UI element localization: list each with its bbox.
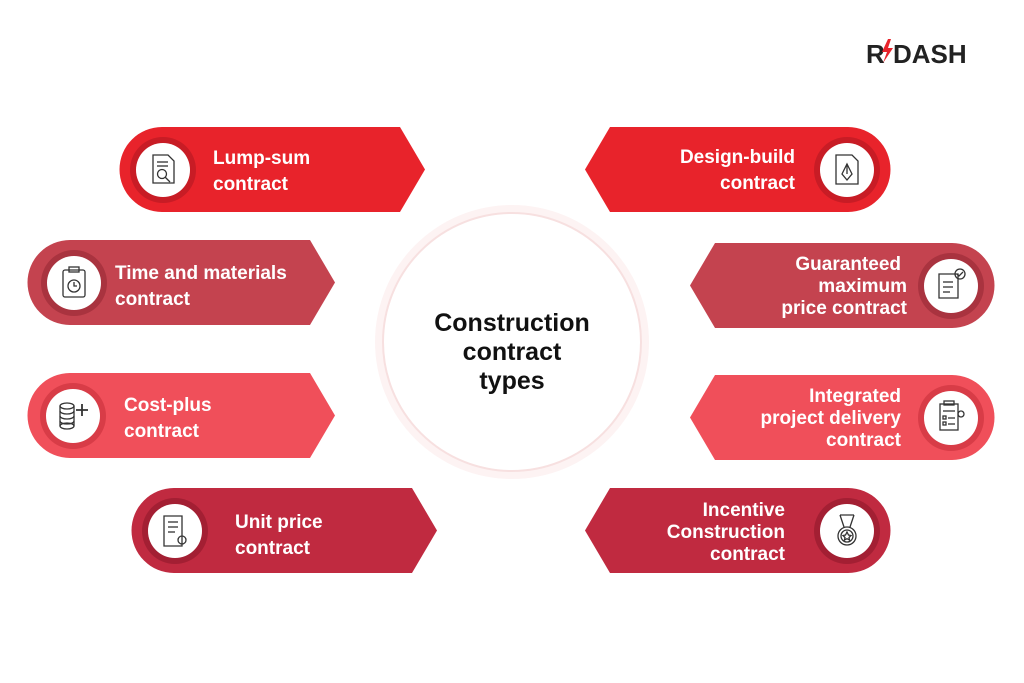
banner: Unit price [132, 488, 437, 573]
icon: scroll check [939, 269, 965, 298]
banner: Integrated project delivery: contract [826, 430, 902, 451]
banner: Time and materials: Time and materials [115, 263, 287, 284]
banner: Cost-plus [28, 373, 335, 458]
banner: Time and materials [28, 240, 335, 325]
icon: medal [838, 515, 856, 545]
banner: Integrated project delivery: Integrated [809, 386, 901, 407]
banner: Lump-sum [120, 127, 425, 212]
banner: Time and materials: contract [115, 289, 191, 310]
banner: Lump-sum: contract [213, 174, 289, 195]
banner: Incentive Construction: Incentive [703, 500, 785, 521]
banner: Unit price: contract [235, 538, 311, 559]
center title: Construction [434, 309, 590, 337]
icon: document search [153, 155, 174, 183]
icon: clipboard gear [940, 401, 964, 430]
banner: Unit price: Unit price [235, 512, 323, 533]
banner: Incentive Construction: Construction [667, 522, 785, 543]
banner: Lump-sum: Lump-sum [213, 148, 310, 169]
icon: price document [164, 516, 186, 546]
title lines: types [479, 367, 545, 395]
title lines: contract [463, 338, 562, 366]
banner: Integrated project delivery: project delivery [761, 408, 901, 429]
title lines [463, 338, 562, 395]
center circle [375, 205, 649, 479]
banner: Design-build [585, 127, 890, 212]
banner: Incentive Construction [585, 488, 890, 573]
banner: Cost-plus: contract [124, 421, 200, 442]
banner: Guaranteed maximum price [690, 243, 994, 328]
banner: Guaranteed maximum price: Guaranteed [795, 254, 901, 275]
banner: Guaranteed maximum price: price contract [781, 298, 908, 319]
logo: DASH [893, 39, 967, 69]
banner: Cost-plus: Cost-plus [124, 395, 212, 416]
banner: Incentive Construction: contract [710, 544, 786, 565]
icon: design pen [836, 155, 858, 184]
banner: Integrated project delivery [690, 375, 994, 460]
icon: coins plus [60, 403, 88, 429]
logo: R [866, 39, 885, 69]
icon: clipboard clock [63, 267, 85, 297]
banner: Design-build: Design-build [680, 147, 795, 168]
banner: Guaranteed maximum price: maximum [818, 276, 907, 297]
banner: Design-build: contract [720, 173, 796, 194]
